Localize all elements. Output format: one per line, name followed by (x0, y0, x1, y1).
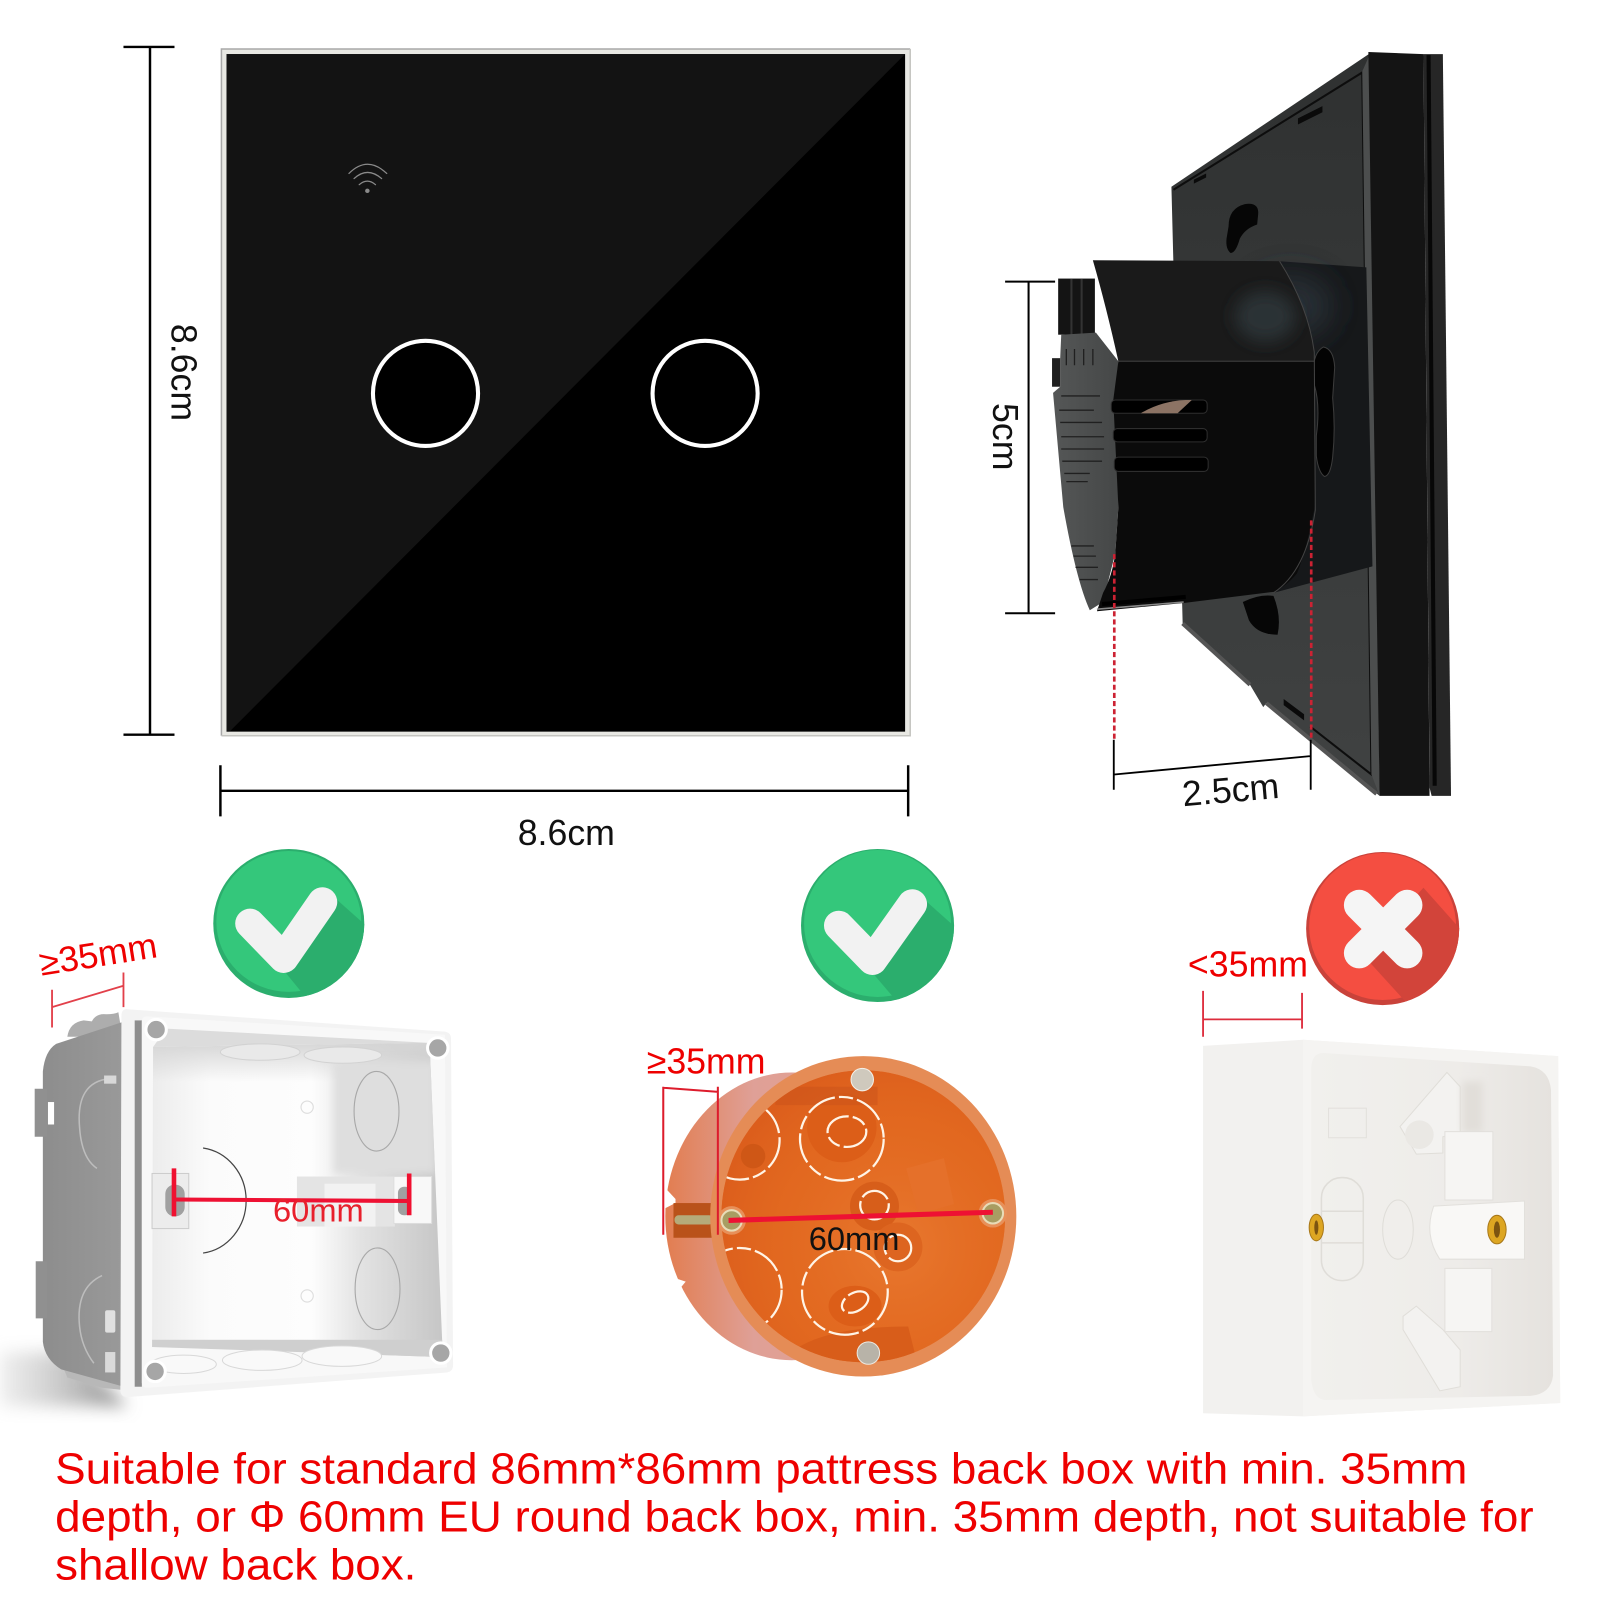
front lip (142, 1016, 447, 1388)
terminal block rear (1053, 333, 1118, 610)
60mm red measure (174, 1168, 409, 1216)
panel: front view of touch switch (221, 49, 910, 736)
brass screws (1309, 1214, 1323, 1241)
side strip, band and glass (1362, 53, 1380, 796)
inner recess (1311, 1053, 1553, 1400)
panel: orange round back box: 60mm (809, 1220, 899, 1257)
right wall shade (1462, 1082, 1483, 1133)
dimension: body height 5cm: 5cm (985, 403, 1025, 470)
dimension: depth 2.5cm with guides (1114, 520, 1311, 814)
side notches (661, 1184, 676, 1210)
side wall (43, 1020, 128, 1388)
text block: suitability note (55, 1445, 1534, 1590)
measure: square box depth (36, 925, 160, 1028)
top mounting ear (1400, 1072, 1460, 1154)
ground shadow (0, 1352, 128, 1406)
icon: right touch button (653, 341, 758, 446)
collar keyhole slot (1313, 347, 1335, 477)
icon: left touch button (373, 341, 478, 446)
text block: suitability note: Suitable for standard 86mm*86mm pattress back box with min. 35mm (55, 1445, 1467, 1494)
dimension: depth 2.5cm with guides: 2.5cm (1180, 766, 1281, 814)
dimension: front height 8.6cm (123, 47, 203, 735)
pin screw (674, 1215, 713, 1224)
panel: side view of switch (1052, 52, 1451, 796)
bottom mounting ear (1403, 1306, 1460, 1391)
interior back wall (152, 1043, 443, 1357)
dashed knockouts (725, 1096, 912, 1336)
measure: square box depth: ≥35mm (36, 925, 160, 984)
dimension: front height 8.6cm: 8.6cm (163, 324, 203, 421)
60mm red measure (729, 1212, 993, 1220)
collar (1273, 261, 1372, 593)
panel: square white back box (0, 1009, 453, 1406)
interior (721, 1070, 1005, 1362)
dimension: front width 8.6cm (220, 765, 908, 853)
rim (710, 1056, 1016, 1377)
frame shadow gap (135, 1020, 142, 1387)
text block: suitability note: shallow back box. (55, 1541, 416, 1590)
back plate (1171, 53, 1380, 796)
measure: round box depth: ≥35mm (647, 1041, 766, 1081)
top knockouts (220, 1044, 382, 1063)
panel: shallow white surface box (1203, 1040, 1560, 1416)
dimension: front width 8.6cm: 8.6cm (518, 813, 615, 853)
knockouts (301, 1071, 400, 1330)
mounting bracket (297, 1177, 395, 1227)
vent slits (1111, 400, 1208, 471)
knockout slot (1321, 1178, 1363, 1281)
outer frame (120, 1009, 453, 1397)
pin recess (673, 1203, 712, 1238)
mounting lugs (152, 1173, 189, 1229)
icon: red cross (1306, 852, 1464, 1010)
icon: wifi indicator (349, 164, 387, 193)
inner mounds and bracket (741, 1087, 954, 1372)
panel: orange round back box (661, 1056, 1016, 1377)
plate slots (1226, 204, 1258, 253)
cylinder body (665, 1072, 918, 1360)
panel: square white back box: 60mm (273, 1191, 364, 1228)
measure: shallow box depth (1188, 945, 1308, 1037)
icon: green check (square box) (213, 849, 364, 998)
top ribs (67, 1012, 122, 1037)
bottom knockouts (151, 1346, 382, 1373)
side knockouts (79, 1079, 110, 1168)
measure: shallow box depth: <35mm (1188, 945, 1308, 985)
measure: round box depth (647, 1041, 766, 1235)
dimension: body height 5cm (985, 282, 1055, 613)
terminal connector top (1058, 279, 1095, 335)
body housing upper (1093, 260, 1314, 361)
text block: suitability note: depth, or Φ 60mm EU round back box, min. 35mm depth, not suitable for (55, 1493, 1534, 1542)
outer box (1203, 1040, 1560, 1416)
body housing lower (1097, 361, 1315, 611)
screws (851, 1068, 873, 1091)
corner screw posts (145, 1019, 451, 1382)
bottom ribs (63, 1367, 120, 1390)
logo imprint (1329, 1108, 1366, 1138)
icon: green check (round box) (801, 849, 959, 1012)
cross bracket (1445, 1132, 1493, 1200)
